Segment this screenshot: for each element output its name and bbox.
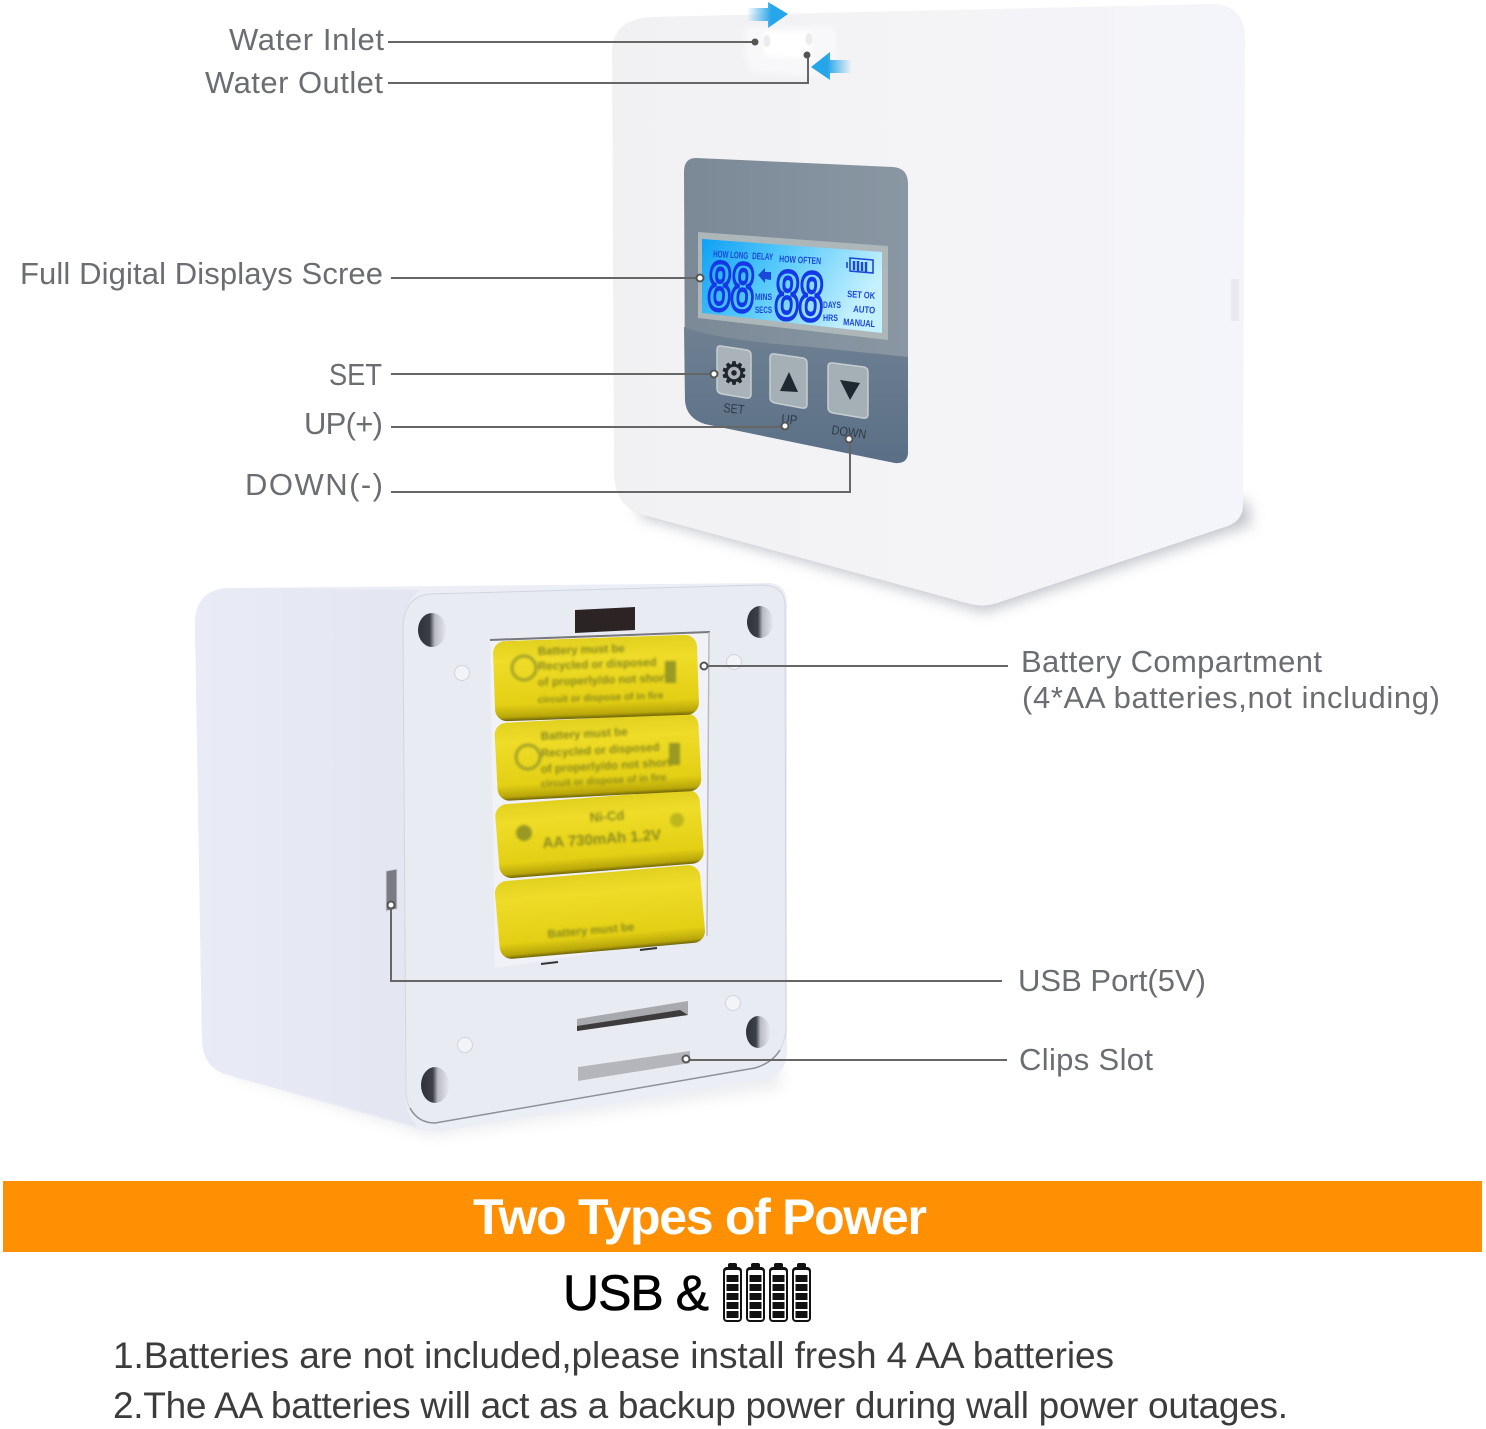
side notch [1231,279,1239,321]
callout: water inlet [229,22,758,57]
LCD digits right: 88 [773,257,825,335]
back plate [403,585,786,1123]
device left face [195,588,420,1127]
icon: gear: ⚙ [720,356,748,392]
battery 4 [494,864,706,960]
LCD digits left: 88 [706,248,756,326]
callout: down: DOWN(-) [245,467,383,502]
icon: down triangle [840,380,860,400]
battery 1: Battery must be [538,643,625,658]
battery 2: Battery must be [541,726,628,743]
button captions: UP [781,411,798,428]
callout: up: UP(+) [304,406,383,441]
icon: up triangle [780,372,798,392]
callout: set: SET [329,357,382,392]
callout: water outlet: Water Outlet [205,65,383,100]
LCD small labels [713,249,876,330]
battery compartment [490,632,710,968]
icon: outlet arrow [811,52,852,80]
callout: battery compartment: (4*AA batteries,not including) [1022,680,1440,715]
callout: usb port [388,902,1206,998]
SET button [717,346,751,398]
LCD small labels: SET OK [847,289,876,302]
battery 2: of properly/do not short [541,757,671,776]
control panel [684,158,908,463]
callout: down [245,436,852,502]
callout: usb port: USB Port(5V) [1018,963,1206,998]
callout: water outlet [205,52,810,100]
plate pegs [454,654,742,1052]
battery 1: of properly/do not short [538,672,669,689]
battery 3 [494,789,705,879]
device shell [195,583,787,1131]
callout: clips slot: Clips Slot [1019,1042,1153,1077]
callout: battery compartment [700,644,1440,715]
button band [684,327,908,463]
lower device: battery side [195,583,787,1136]
DOWN button [828,363,868,418]
LCD small labels: HRS [823,313,838,324]
UP button [770,354,807,408]
callout: clips slot [682,1042,1153,1077]
subheading: usb and batteries: USB & [563,1265,709,1321]
callout: set [329,357,718,392]
button captions: DOWN [831,422,867,442]
LCD screen [698,232,888,340]
battery 3: Ni-Cd [589,808,625,825]
note 1: 1.Batteries are not included,please install fresh 4 AA batteries [113,1335,1114,1376]
screw holes [418,606,773,1103]
clip slot upper [577,1001,688,1031]
battery 1: circuit or dispose of in fire [538,691,664,706]
callout: digital display [20,256,704,291]
LCD small labels: HOW LONG [713,249,748,262]
icon: LCD battery [847,258,873,273]
LCD small labels: DELAY [752,251,774,263]
icon: inlet arrow [747,2,788,28]
battery 1 [493,634,699,722]
callout: battery compartment: Battery Compartment [1021,644,1322,679]
icon: LCD arrow [758,268,771,283]
note lines [113,1335,1288,1426]
LCD small labels: DAYS [823,300,841,311]
LCD small labels: AUTO [853,304,876,317]
note 2: 2.The AA batteries will act as a backup power during wall power outages. [113,1385,1288,1426]
upper device: timer body [612,2,1252,612]
battery 3: AA 730mAh 1.2V [542,827,662,852]
subheading: usb and batteries [563,1263,811,1322]
LCD small labels: MINS [755,292,772,303]
battery latch [575,607,635,633]
button captions [723,400,867,442]
battery 1: Recycled or disposed [538,657,657,673]
clip slot lower [578,1051,690,1081]
icon: four batteries [723,1263,811,1322]
battery 2 [494,713,702,801]
battery 2: circuit or dispose of in fire [541,772,667,790]
callout: digital display: Full Digital Displays Scree [20,256,383,291]
callout: up [304,406,788,441]
callout: water inlet: Water Inlet [229,22,384,57]
banner: two types of power [3,1181,1482,1252]
LCD small labels: SECS [755,305,772,316]
battery 2: Recycled or disposed [541,742,660,760]
banner heading: Two Types of Power [473,1189,927,1245]
device shell [612,4,1245,606]
water connector [745,26,838,76]
battery 4: Battery must be [547,921,635,941]
LCD small labels: MANUAL [843,317,876,330]
button captions: SET [723,400,745,417]
USB port [386,869,397,911]
LCD small labels: HOW OFTEN [779,254,821,267]
